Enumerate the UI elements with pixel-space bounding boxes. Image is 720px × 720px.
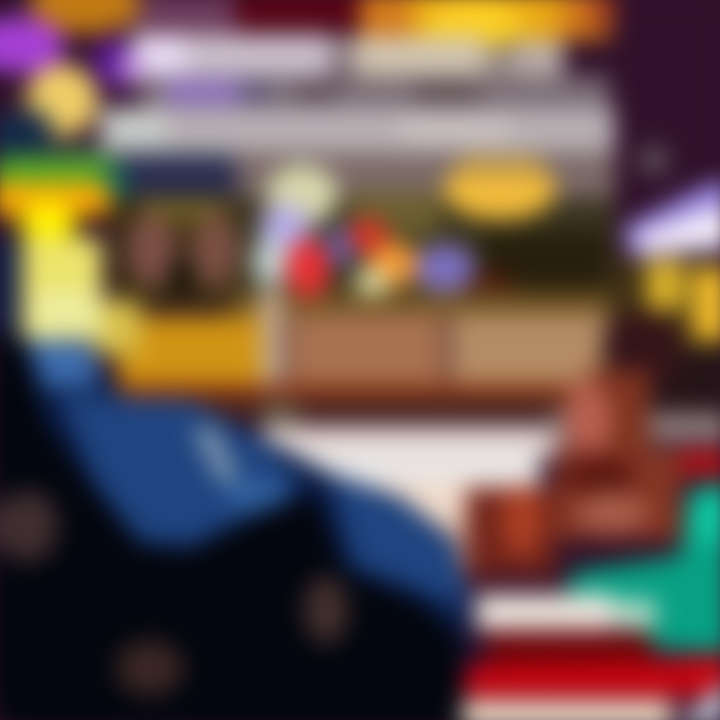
red and white stripes	[456, 594, 720, 720]
cups	[466, 310, 682, 576]
right building	[612, 144, 720, 442]
middle panel	[112, 152, 615, 316]
title	[100, 34, 615, 162]
lower cards	[95, 300, 608, 426]
green tablecloth	[565, 482, 720, 652]
rainbow arch	[0, 156, 126, 358]
flags	[252, 165, 475, 404]
navy sack	[0, 238, 470, 720]
table surface	[262, 412, 720, 580]
header decorations	[0, 0, 615, 163]
